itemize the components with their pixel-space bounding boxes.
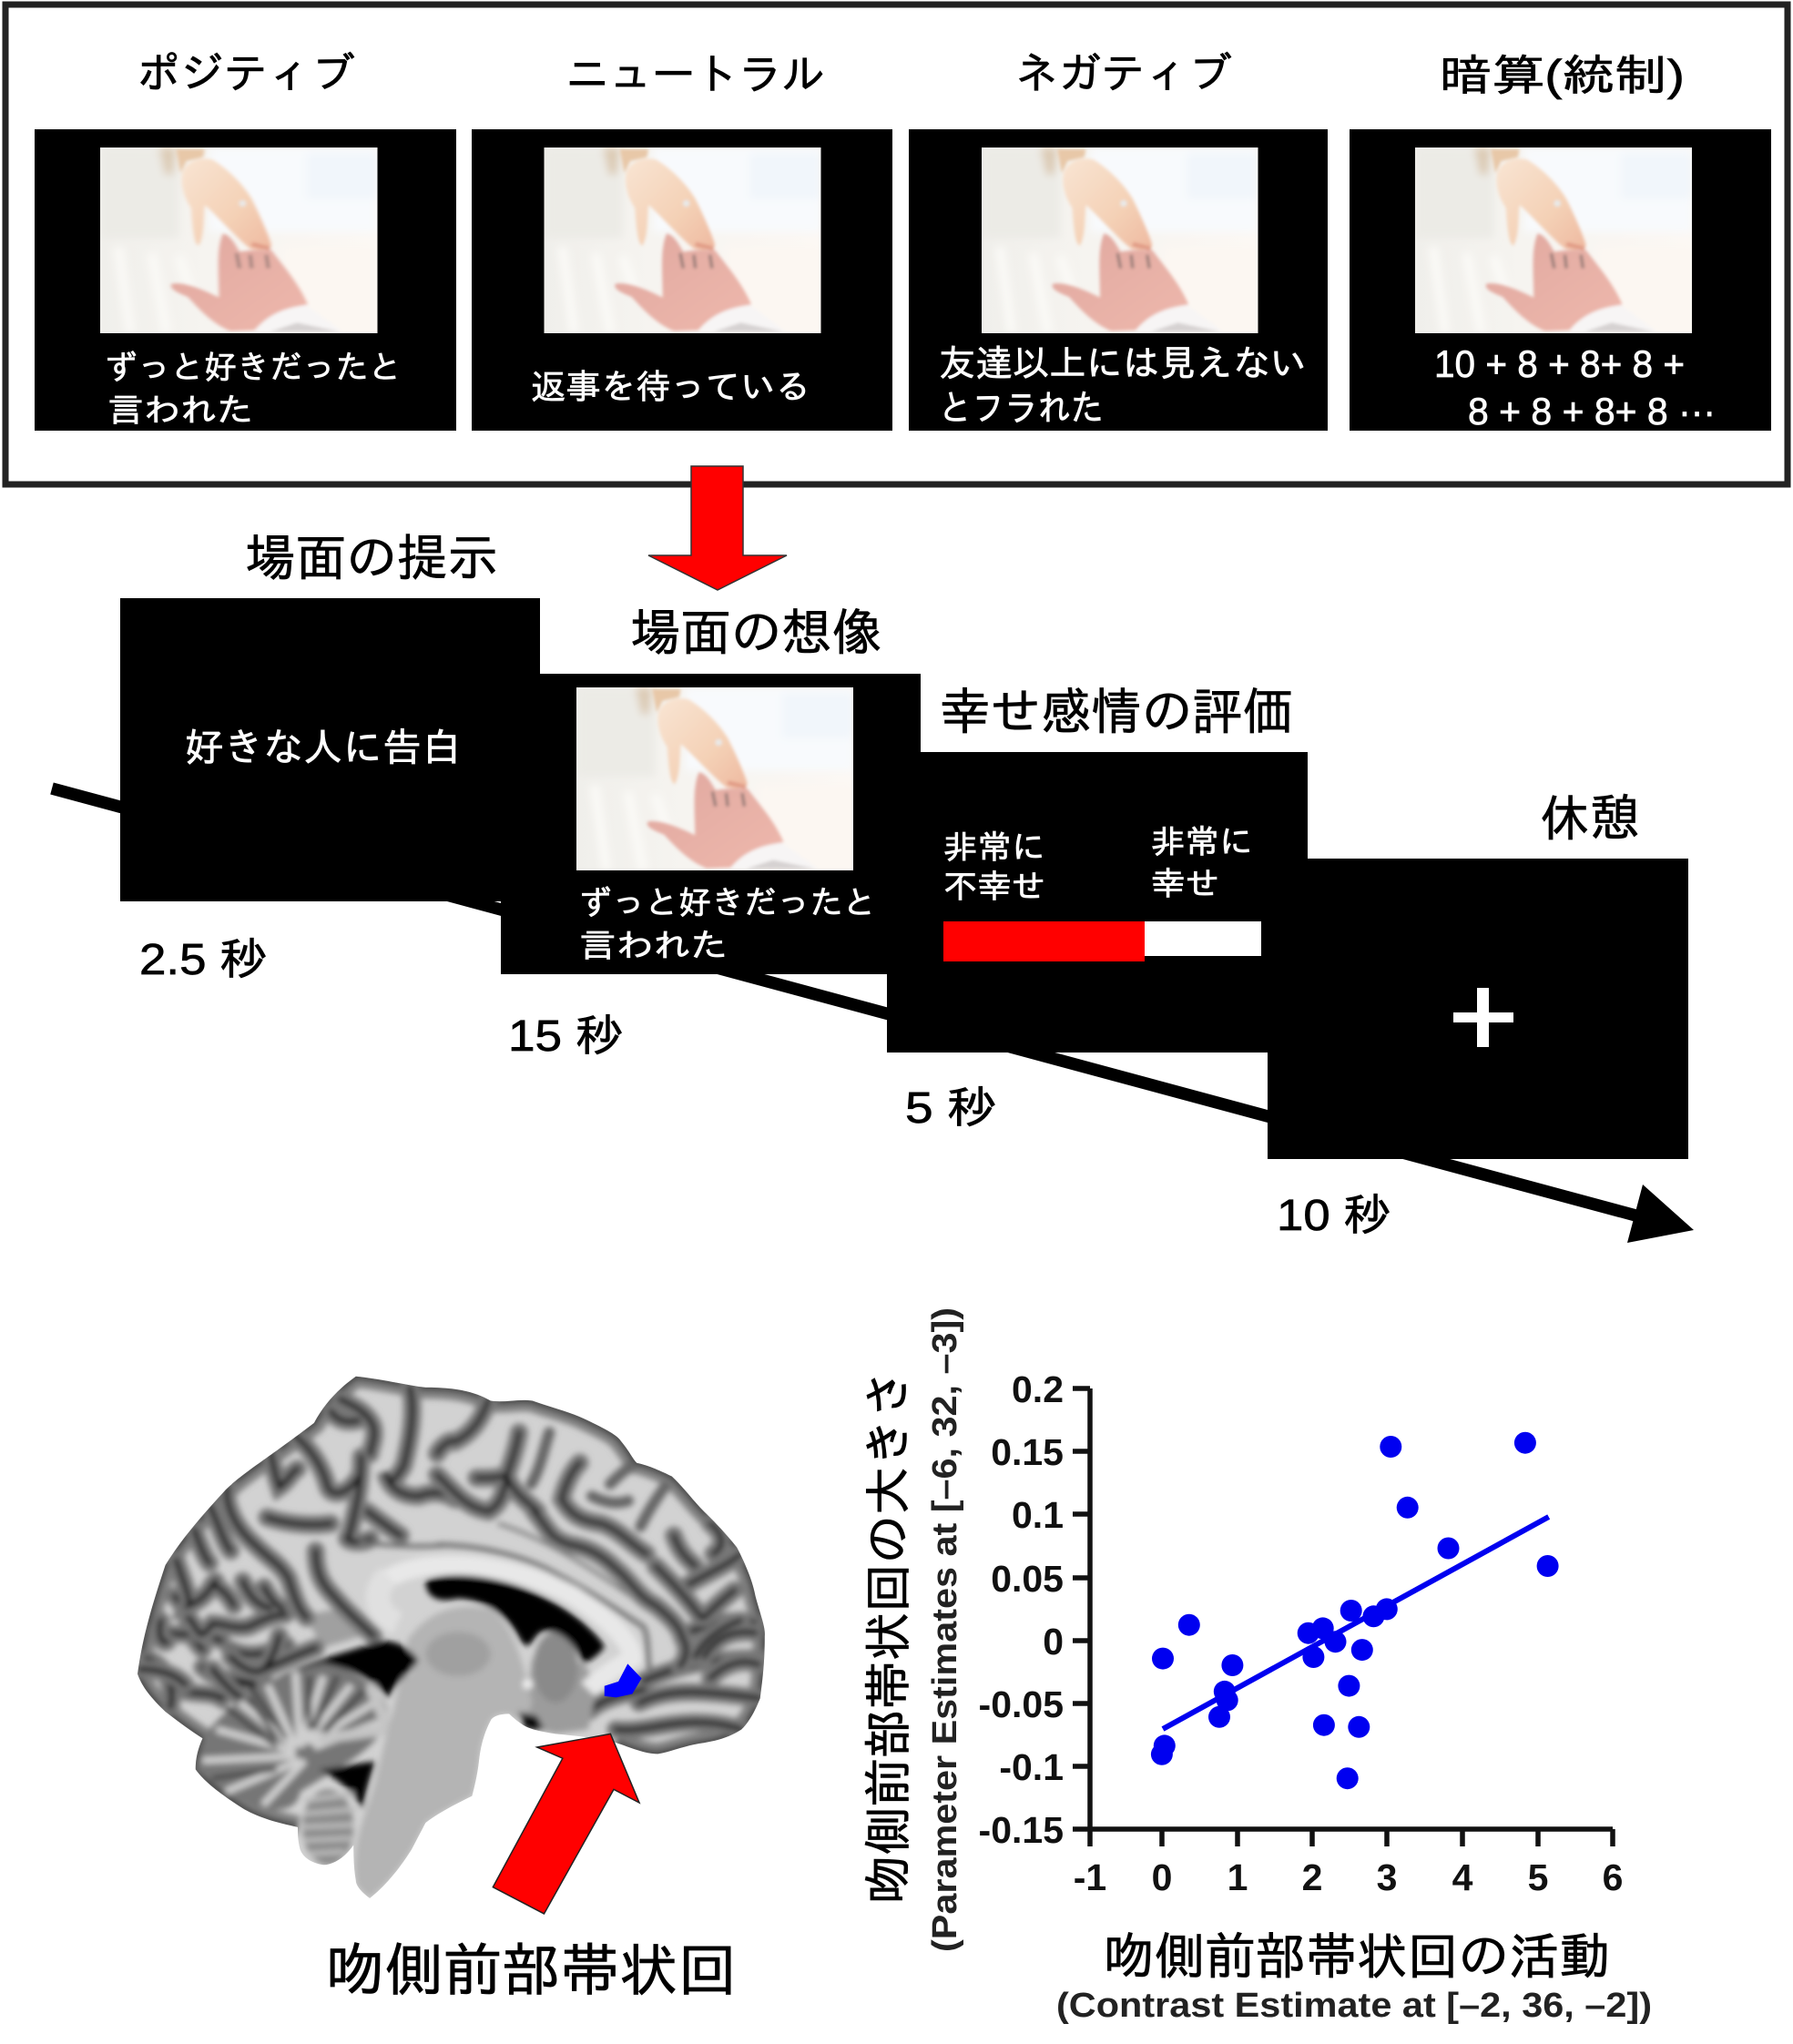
y tick labels: 0.1: [1012, 1494, 1064, 1536]
axes: [1073, 1388, 1613, 1846]
outer frame: [5, 5, 1788, 484]
caption: imagination: ずっと好きだったと: [579, 884, 876, 921]
caption: neutral: 返事を待っている: [531, 369, 810, 407]
timeline arrow: [52, 788, 1694, 1243]
x tick labels: 6: [1603, 1856, 1623, 1898]
photo: hands: [982, 147, 1258, 333]
time: 10 seconds: 10 秒: [1277, 1192, 1391, 1240]
panel: scene imagination: [501, 674, 921, 974]
brain MRI sagittal slice: [127, 1366, 783, 1930]
subcortical structures: [196, 1565, 632, 1898]
label: rostral anterior cingulate gyrus: 吻側前部帯状回: [326, 1939, 737, 2003]
caption: negative: 友達以上には見えない: [939, 344, 1307, 384]
y tick labels: -0.15: [979, 1809, 1064, 1851]
panel: happiness rating: 不幸せ: [943, 868, 1045, 905]
data points: [1151, 1432, 1559, 1789]
heading: happiness rating: 幸せ感情の評価: [940, 684, 1293, 740]
x tick labels: 5: [1528, 1856, 1548, 1898]
panel: scene presentation: [120, 598, 540, 901]
x tick labels: [1074, 1856, 1623, 1898]
anterior cortical folds: [437, 1399, 759, 1678]
time: 5 seconds: 5 秒: [905, 1084, 997, 1133]
posterior cortical folds: [139, 1387, 455, 1696]
label: very unhappy: 非常に: [943, 829, 1045, 866]
activation: rostral anterior cingulate: [605, 1663, 642, 1697]
arrow: red pointing to activation: [493, 1734, 639, 1914]
photo: hands: [100, 147, 377, 333]
heading: scene imagination: 場面の想像: [630, 605, 882, 661]
card: negative: [909, 129, 1328, 431]
y tick labels: 0.15: [991, 1431, 1064, 1473]
heading: mental arithmetic control: 暗算(統制): [1440, 51, 1685, 99]
panel: scene imagination: 言われた: [579, 927, 728, 964]
photo: hands: [576, 687, 853, 870]
x axis label English: (Contrast Estimate at [–2, 36, –2]): [1056, 1987, 1652, 2025]
y tick labels: 0: [1043, 1621, 1064, 1663]
caption: arithmetic: 10 + 8 + 8+ 8 +: [1434, 342, 1685, 385]
photo: hands: [1415, 147, 1692, 333]
y tick labels: -0.1: [999, 1746, 1064, 1788]
photo: hands: [545, 147, 821, 333]
heading: scene presentation: 場面の提示: [245, 530, 498, 586]
card: neutral: [472, 129, 892, 431]
x tick labels: 3: [1377, 1856, 1397, 1898]
heading: positive: ポジティブ: [137, 49, 355, 97]
panel: happiness rating: 幸せ: [1151, 865, 1219, 902]
x tick labels: 2: [1302, 1856, 1322, 1898]
x tick labels: -1: [1074, 1856, 1106, 1898]
x tick labels: 4: [1452, 1856, 1473, 1898]
heading: neutral: ニュートラル: [565, 50, 825, 98]
fixation cross: [1453, 988, 1513, 1047]
y axis label English: (Parameter Estimates at [–6, 32, –3]): [926, 1307, 964, 1952]
y tick labels: 0.2: [1012, 1368, 1064, 1410]
card: negative: とフラれた: [939, 389, 1104, 429]
heading: negative: ネガティブ: [1014, 49, 1232, 97]
x tick labels: 0: [1152, 1856, 1172, 1898]
activation and pointer: [493, 1663, 642, 1914]
time: 2.5 seconds: 2.5 秒: [139, 936, 268, 984]
y tick labels: -0.05: [979, 1683, 1064, 1725]
card: arithmetic: 8 + 8 + 8+ 8 ···: [1468, 390, 1716, 432]
panel: rest: [1268, 859, 1688, 1159]
scatter plot: [862, 1307, 1652, 2025]
x axis label Japanese: 吻側前部帯状回の活動: [1104, 1928, 1610, 1985]
time: 15 seconds: 15 秒: [508, 1012, 624, 1061]
card: positive: 言われた: [107, 392, 253, 429]
panel: happiness rating: [887, 752, 1308, 1053]
arrow: down red: [648, 466, 787, 590]
label: very happy: 非常に: [1151, 823, 1253, 860]
card: positive: [35, 129, 456, 431]
card: arithmetic: [1350, 129, 1771, 432]
y axis label Japanese: 吻側前部帯状回の大きさ: [862, 1369, 916, 1904]
panel: four scenario conditions: [5, 5, 1788, 484]
x tick labels: 1: [1228, 1856, 1248, 1898]
label: instruction text: 好きな人に告白: [184, 727, 462, 770]
caption: positive: ずっと好きだったと: [105, 349, 402, 386]
cortex edge and lower folds: [138, 1377, 765, 1827]
regression line: [1163, 1517, 1549, 1729]
rating bar: [943, 921, 1261, 961]
y tick labels: 0.05: [991, 1558, 1064, 1600]
y tick labels: [979, 1368, 1064, 1851]
heading: rest: 休憩: [1540, 790, 1640, 847]
